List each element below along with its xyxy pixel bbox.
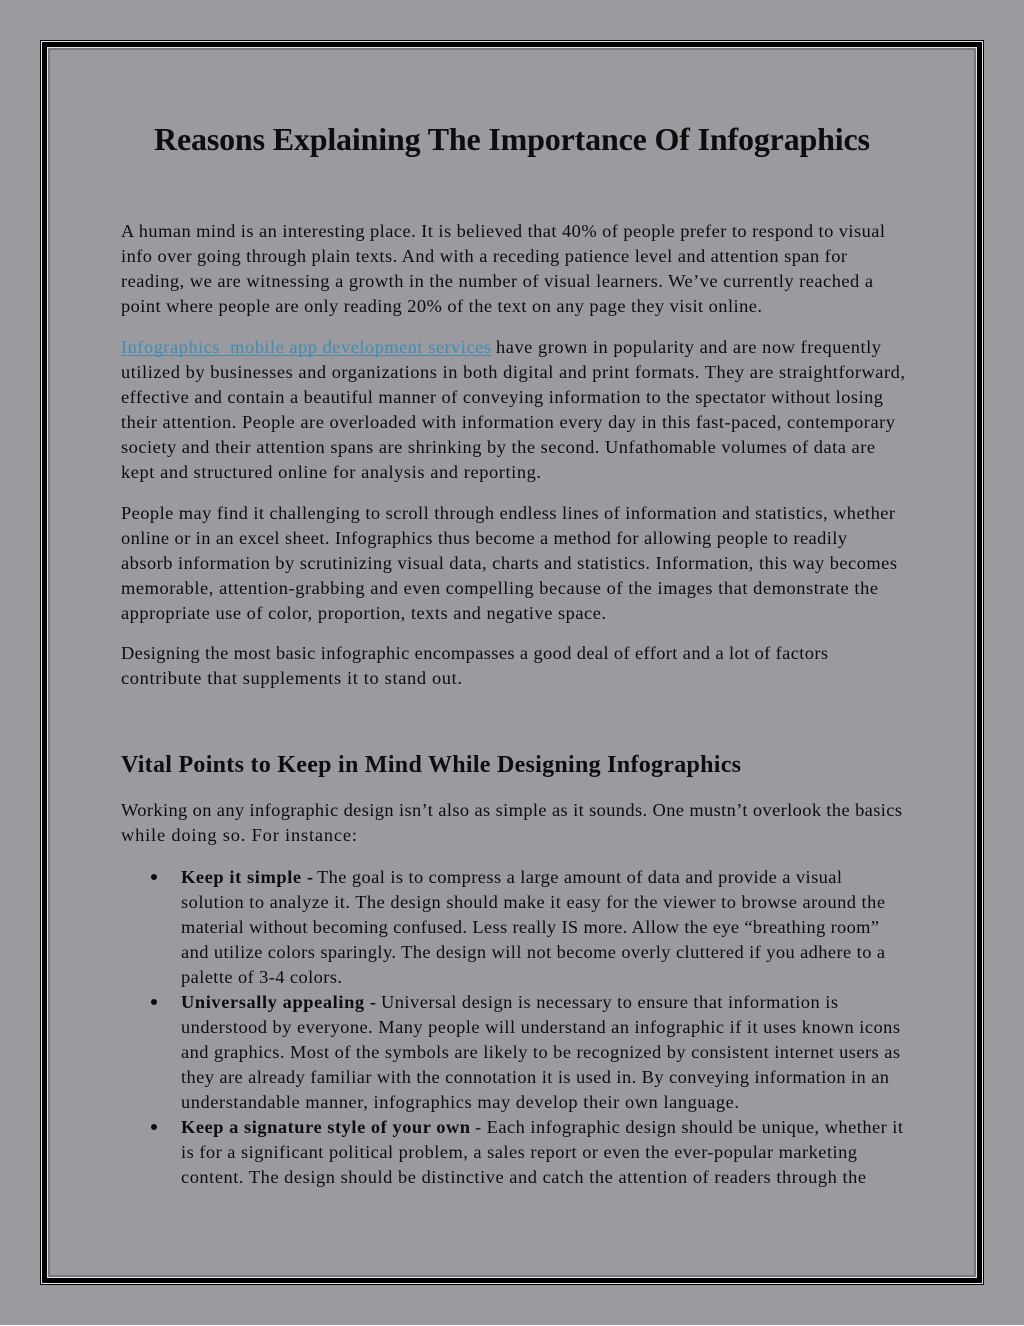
bullet: signature style: is for a significant political problem, a sales report or even the ever-popular marketing bbox=[181, 1142, 857, 1162]
bullet: signature style: Keep a signature style of your own bbox=[181, 1117, 470, 1137]
paragraph: scrolling through data: absorb information by scrutinizing visual data, charts and statistics. Information, this way becomes bbox=[121, 553, 897, 573]
bullet: keep it simple: solution to analyze it. The design should make it easy for the viewer to browse around the bbox=[181, 892, 885, 912]
section heading: Vital Points to Keep in Mind While Designing Infographics bbox=[121, 752, 741, 778]
intro paragraph bbox=[121, 221, 885, 316]
bullet: universally appealing: understandable manner, infographics may develop their own language. bbox=[181, 1092, 739, 1112]
section intro: Working on any infographic design isn’t also as simple as it sounds. One mustn’t overlook the basics bbox=[121, 800, 902, 820]
bullet: signature style: content. The design should be distinctive and catch the attention of readers through the bbox=[181, 1167, 866, 1187]
paragraph: scrolling through data: online or in an excel sheet. Infographics thus become a method for allowing people to readily bbox=[121, 528, 848, 548]
paragraph: designing basics: contribute that supplements it to stand out. bbox=[121, 668, 462, 688]
intro paragraph: reading, we are witnessing a growth in the number of visual learners. We’ve currently reached a bbox=[121, 271, 873, 291]
title: Reasons Explaining The Importance Of Infographics bbox=[154, 121, 870, 157]
paragraph with link: society and their attention spans are shrinking by the second. Unfathomable volumes of data are bbox=[121, 437, 875, 457]
paragraph with link: utilized by businesses and organizations in both digital and print formats. They are straightforward, bbox=[121, 362, 905, 382]
paragraph: scrolling through data: People may find it challenging to scroll through endless lines of information and statistics, whether bbox=[121, 503, 895, 523]
bullet: universally appealing: Universally appealing - bbox=[181, 992, 376, 1012]
intro paragraph: info over going through plain texts. And with a receding patience level and attention span for bbox=[121, 246, 847, 266]
paragraph with link: kept and structured online for analysis and reporting. bbox=[121, 462, 541, 482]
section intro: while doing so. For instance: bbox=[121, 825, 357, 845]
intro paragraph: point where people are only reading 20% of the text on any page they visit online. bbox=[121, 296, 762, 316]
bullet: keep it simple: palette of 3-4 colors. bbox=[181, 967, 342, 987]
paragraph with link: their attention. People are overloaded with information every day in this fast-paced, contemporary bbox=[121, 412, 896, 432]
bullet list bbox=[151, 867, 903, 1187]
bullet: keep it simple: and utilize colors sparingly. The design will not become overly cluttered if you adhere to a bbox=[181, 942, 885, 962]
paragraph: scrolling through data bbox=[121, 503, 897, 623]
bullet: universally appealing bbox=[151, 992, 900, 1112]
intro paragraph: A human mind is an interesting place. It is believed that 40% of people prefer to respond to visual bbox=[121, 221, 885, 241]
paragraph with link: effective and contain a beautiful manner of conveying information to the spectator without losing bbox=[121, 387, 883, 407]
section intro bbox=[121, 800, 902, 845]
bullet: universally appealing: understood by everyone. Many people will understand an infographic if it uses known icons bbox=[181, 1017, 900, 1037]
bullet: keep it simple: material without becoming confused. Less really IS more. Allow the eye “breathing room” bbox=[181, 917, 879, 937]
bullet: keep it simple: The goal is to compress a large amount of data and provide a visual bbox=[317, 867, 842, 887]
link: mobile app development services: Infographics mobile app development services bbox=[121, 337, 491, 357]
bullet: keep it simple bbox=[151, 867, 885, 987]
paragraph: scrolling through data: appropriate use of color, proportion, texts and negative space. bbox=[121, 603, 606, 623]
paragraph with link: have grown in popularity and are now frequently bbox=[496, 337, 882, 357]
bullet: universally appealing: and graphics. Most of the symbols are likely to be recognized by consistent internet users as bbox=[181, 1042, 900, 1062]
bullet: signature style bbox=[151, 1117, 903, 1187]
paragraph with link bbox=[121, 337, 905, 482]
paragraph: scrolling through data: memorable, attention-grabbing and even compelling because of the images that demonstrate the bbox=[121, 578, 878, 598]
bullet: keep it simple: Keep it simple - bbox=[181, 867, 313, 887]
paragraph: designing basics bbox=[121, 643, 828, 688]
bullet: universally appealing: they are already familiar with the connotation it is used in. By conveying information in an bbox=[181, 1067, 889, 1087]
bullet: signature style: - Each infographic design should be unique, whether it bbox=[475, 1117, 903, 1137]
paragraph: designing basics: Designing the most basic infographic encompasses a good deal of effort and a lot of factors bbox=[121, 643, 828, 663]
bullet: universally appealing: Universal design is necessary to ensure that information is bbox=[381, 992, 838, 1012]
